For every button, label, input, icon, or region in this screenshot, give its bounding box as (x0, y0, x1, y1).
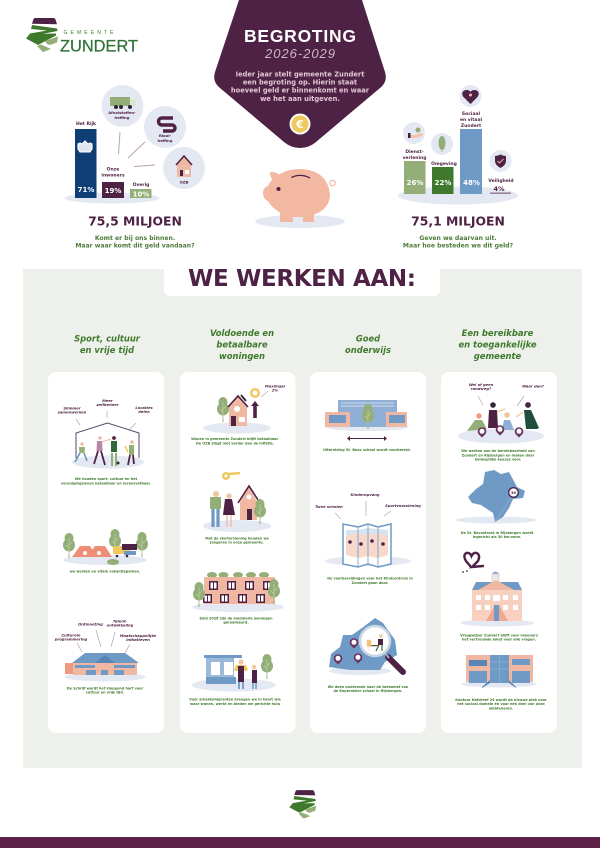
text: arbeidsmigranten (189, 698, 282, 706)
bar: Dienstverlening 26%: verlening (403, 155, 426, 161)
text: De Schrijf: cultuur en vrije tijd. (86, 690, 124, 694)
header badge: hoeveel geld er binnenkomt en waar (231, 86, 370, 94)
text: Vraagwijzer: Vraagwijzer Zundert blijft voor inwoners (460, 634, 538, 638)
icon: rioolheffing (144, 106, 186, 148)
illustration: De Schrijf: ontwikkeling (107, 624, 134, 628)
text: starterslening: Met de starterslening houden we (205, 536, 269, 540)
illustration: De Schrijf: Talent- (113, 620, 128, 624)
bar: Veiligheid 4% (488, 150, 514, 194)
panel: column 4 gemeente (441, 372, 557, 733)
text: sport: verenigingsleven betaalbaar en levensvatbaar. (61, 482, 151, 486)
bar: Het Rijk 71%: Het Rijk (76, 121, 97, 127)
illustration: sportzaal (58, 399, 153, 468)
text: bereikbaarheid: Zundert en Rijsbergen en maken daar (462, 453, 535, 457)
logo: Gemeente Zundert (26, 18, 138, 56)
text: sport (61, 477, 151, 486)
bar: Het Rijk 71%: 71% (78, 186, 94, 194)
bar: Dienstverlening 26%: 26% (407, 179, 423, 187)
column heading: sport (74, 334, 141, 355)
illustration: De Schrijf: programmering (54, 638, 88, 642)
text: De Schrijf (67, 686, 143, 694)
text: modulaire woningen: gerealiseerd. (223, 620, 249, 624)
text: Hofdreef (455, 698, 547, 710)
chart: inkomsten (65, 85, 205, 228)
illustration: De Schrijf: initiatieven (126, 638, 150, 642)
text: starterslening: jongeren in onze gemeente. (209, 540, 264, 544)
illustration: De Schrijf: Culturele (61, 634, 81, 638)
header badge: BEGROTING (244, 26, 356, 46)
icon: hart (462, 553, 483, 573)
text: kindcentrum: De voorbereidingen voor het Kindcentrum in (327, 576, 413, 580)
text: inkomsten: Maar waar komt dit geld vandaan? (75, 242, 195, 249)
bar: Overig 10%: Overig (133, 182, 149, 188)
icon: afvalstoffenheffing: heffing (115, 115, 130, 120)
illustration: OZB huis: Maximaal (265, 384, 286, 388)
text: sport: We houden sport, cultuur en het (75, 477, 137, 481)
text: inkomsten: Komt er bij ons binnen. (95, 235, 175, 242)
bar: Overig 10%: 10% (133, 190, 149, 198)
column heading: sport: Sport, cultuur (74, 334, 141, 344)
panel: column 2 woningen (180, 372, 296, 733)
illustration: sportzaal: Locaties (135, 406, 153, 410)
text: 30 km-zone: De St. Bavostraat in Rijsbergen wordt (461, 531, 534, 535)
logo: Gemeente Zundert: ZUNDERT (60, 38, 138, 56)
illustration: De Schrijf: Maatschappelijke (120, 634, 157, 638)
column heading: gemeente: gemeente (474, 351, 522, 361)
text: St. Bavo: Uitbreiding St. Bavo school wordt voorbereid. (323, 448, 411, 452)
text: bereikbaarheid (461, 449, 535, 462)
column heading: onderwijs: Goed (356, 334, 381, 344)
header badge: we het aan uitgeven. (260, 95, 340, 103)
chart: uitgaven (398, 85, 518, 228)
column heading: woningen: woningen (219, 351, 265, 361)
bar: Onze inwoners 19% (101, 166, 125, 198)
text: Koperakker (328, 685, 409, 693)
illustration: sportzaal: Meer (102, 399, 114, 403)
illustration: OZB huis: 2% (272, 388, 278, 392)
illustration: kindcentrum kaart: Kinderopvang (350, 493, 380, 497)
text: Vraagwijzer: het vertrouwde loket voor alle vragen. (462, 638, 536, 642)
text: bereikbaarheid: belangrijke keuzes voor. (475, 458, 521, 462)
panel: column 1 sport (48, 372, 164, 733)
text: OZB: Wonen in gemeente Zundert blijft betaalbaar. (191, 437, 279, 441)
header badge: € (295, 118, 304, 131)
icon: rioolheffing: heffing (158, 138, 173, 143)
bar: Onze inwoners 19%: 19% (105, 187, 121, 195)
column heading: onderwijs: onderwijs (345, 345, 391, 355)
text: vakantieparken: we werken an vitale vakantieparken. (70, 570, 140, 574)
column heading: onderwijs (345, 334, 391, 355)
bar: Sociaal en vitaal Zundert 48% (460, 85, 482, 194)
illustration: OZB huis (203, 384, 286, 434)
bar: Onze inwoners 19%: inwoners (101, 172, 125, 178)
bar: Het Rijk 71% (75, 121, 97, 198)
illustration: randweg gesprek: Wel of geen (469, 383, 494, 387)
icon: rioolheffing: Riool- (159, 133, 172, 138)
illustration: kaart 30 km-zone: 30 (511, 490, 516, 495)
text: Koperakker: We doen onderzoek naar de toekomst van (328, 685, 409, 689)
illustration: kantoor Hofdreef (461, 655, 537, 688)
text: OZB: De OZB stijgt niet verder dan de inflatie. (196, 442, 274, 446)
illustration: kaart 30 km-zone (456, 470, 536, 524)
text: arbeidsmigranten: waar wonen, werkt en bieden we gerichte hulp (190, 702, 281, 706)
bar: Veiligheid 4%: 4% (493, 185, 505, 193)
illustration: randweg gesprek (458, 383, 545, 444)
illustration: sportzaal: samenwerken (58, 410, 87, 414)
text: De Schrijf: De Schrijf wordt het kloppend hart voor (67, 686, 143, 690)
column heading: woningen: Voldoende en (210, 328, 274, 338)
icon: OZB (163, 147, 205, 189)
header badge: Ieder jaar stelt gemeente Zundert (236, 70, 365, 78)
illustration: Koperakker kaart (329, 618, 403, 675)
footer logo mark (289, 790, 316, 819)
header badge (214, 0, 386, 148)
column heading: gemeente (458, 328, 537, 361)
bar: Dienstverlening 26%: Dienst- (405, 149, 424, 155)
total: 75,5 miljoen: 75,5 MILJOEN (88, 214, 182, 228)
column heading: woningen (210, 328, 274, 361)
illustration: De Schrijf: Ontmoeting (78, 622, 103, 626)
logo: Gemeente Zundert: GEMEENTE (64, 30, 114, 36)
icon: afvalstoffenheffing (102, 85, 144, 127)
text: uitgaven: Geven we daarvan uit. (419, 235, 497, 242)
column heading: gemeente: Een bereikbare (462, 328, 534, 338)
illustration: randweg gesprek: randweg? (471, 387, 492, 391)
illustration: modulaire woningen (192, 572, 284, 612)
illustration: randweg gesprek: Waar dan? (522, 384, 545, 388)
bar: Omgeving 22% (431, 133, 457, 194)
illustration: arbeidsmigranten (192, 654, 276, 692)
illustration: sportzaal: delen (138, 410, 150, 414)
text: modulaire woningen: Eind 2026 zijn de modulaire woningen (200, 616, 273, 620)
piggy bank (255, 169, 345, 228)
header badge: 2026-2029 (264, 46, 335, 61)
text: uitgaven (403, 235, 514, 249)
text: arbeidsmigranten: Voor arbeidsmigranten brengen we in kaart wie (189, 698, 282, 702)
panel: we werken aan (23, 269, 582, 768)
text: 30 km-zone: ingericht als 30 km-zone. (473, 535, 521, 539)
arrow: uitbreiding (347, 436, 387, 441)
bar: Omgeving 22%: 22% (435, 179, 451, 187)
bar: Sociaal en vitaal Zundert 48%: 48% (463, 179, 480, 187)
text: modulaire woningen (200, 616, 273, 624)
text: Vraagwijzer (460, 634, 538, 642)
illustration: sportzaal: Slimmer (63, 406, 82, 410)
column heading: sport: en vrije tijd (80, 345, 135, 355)
bar: Veiligheid 4%: Veiligheid (488, 178, 514, 184)
text: kindcentrum: Zundert gaan door. (352, 581, 388, 585)
text: Koperakker: de Koperakker school in Rijsbergen. (333, 689, 403, 693)
text: bereikbaarheid: We werken aan de bereikbaarheid van (461, 449, 535, 453)
illustration: kindcentrum kaart: Twee scholen (315, 505, 343, 509)
bar: Sociaal en vitaal Zundert 48%: en vitaal (460, 117, 482, 123)
illustration: Vraagwijzer gebouw (460, 572, 534, 626)
panel: column 3 onderwijs (310, 372, 426, 733)
text: Hofdreef: Kantoor Hofdreef 24 wordt de nieuwe plek voor (455, 698, 547, 702)
illustration: vakantieparken (63, 529, 148, 565)
bar: Omgeving 22%: Omgeving (431, 161, 457, 167)
bar: Overig 10% (130, 182, 152, 198)
icon: OZB: OZB (180, 180, 189, 184)
header badge: een begroting op. Hierin staat (243, 78, 358, 86)
footer bar (0, 837, 600, 848)
text: kindcentrum (327, 576, 413, 585)
column heading: gemeente: en toegankelijke (458, 340, 537, 350)
text: Hofdreef: ambtenaren. (489, 706, 513, 710)
text: uitgaven: Maar hoe besteden we dit geld? (403, 242, 514, 249)
text: starterslening (205, 536, 269, 544)
bar: Onze inwoners 19%: Onze (107, 166, 119, 172)
bar: Sociaal en vitaal Zundert 48%: Sociaal (462, 111, 481, 117)
illustration: starterslening (203, 472, 271, 532)
connector lines (118, 132, 155, 166)
heading tab: WE WERKEN AAN: (188, 266, 416, 292)
illustration: kindcentrum kaart: Sportvoorziening (385, 504, 421, 508)
text: inkomsten (75, 235, 195, 249)
bar: Sociaal en vitaal Zundert 48%: Zundert (461, 123, 482, 129)
illustration: sportzaal: zelfbeheer (95, 403, 120, 407)
text: 30 km-zone (461, 531, 534, 539)
icon: afvalstoffenheffing: Afvalstoffen- (108, 110, 136, 115)
total: 75,1 miljoen: 75,1 MILJOEN (411, 214, 505, 228)
text: Hofdreef: het sociaal domein én voor een deel van onze (457, 702, 545, 706)
column heading: woningen: betaalbare (216, 340, 268, 350)
illustration: De Schrijf (54, 620, 157, 682)
illustration: kindcentrum kaart (315, 493, 421, 567)
bar: Dienstverlening 26% (403, 122, 426, 194)
text: OZB (191, 437, 279, 446)
illustration: St. Bavo school (325, 400, 409, 431)
